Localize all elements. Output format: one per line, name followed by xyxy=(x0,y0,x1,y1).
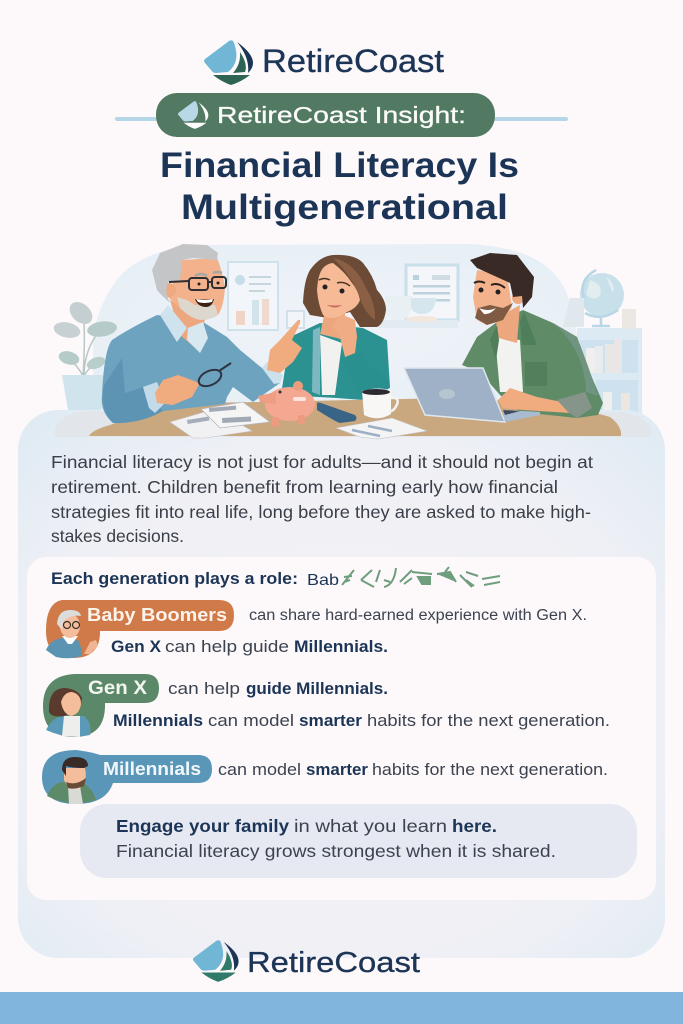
millennials role: smarter xyxy=(306,761,369,779)
hair xyxy=(303,255,386,327)
callout xyxy=(80,804,637,878)
neck xyxy=(320,310,345,340)
coffee mug xyxy=(362,388,398,418)
gen x role xyxy=(168,680,388,698)
millennials role xyxy=(218,761,608,779)
smartphone xyxy=(317,402,356,423)
illustration backdrop xyxy=(93,244,590,410)
gen x role: guide Millennials. xyxy=(246,680,388,698)
small frame xyxy=(287,311,304,328)
callout: in what you learn xyxy=(294,816,447,836)
shelf with cups xyxy=(378,296,458,328)
intro paragraph: Financial literacy is not just for adults—and it should not begin at xyxy=(51,452,593,472)
icon: banner logo xyxy=(178,101,208,129)
plant xyxy=(52,298,118,411)
young man xyxy=(462,253,603,418)
intro paragraph: stakes decisions. xyxy=(51,526,184,546)
avatar: older man xyxy=(46,610,98,658)
role line: millennials: Millennials xyxy=(113,712,203,730)
millennials role: can model xyxy=(218,761,301,779)
woman's hand xyxy=(333,315,357,357)
intro paragraph: strategies fit into real life, long before they are asked to make high- xyxy=(51,502,591,522)
held eyeglasses xyxy=(196,363,231,389)
millennials role: habits for the next generation. xyxy=(372,761,608,779)
head xyxy=(168,258,225,320)
role line: millennials: can model xyxy=(208,712,294,730)
baby boomers role: can share hard-earned experience with Gen X. xyxy=(249,607,587,624)
glasses xyxy=(169,277,226,290)
leaf flourish xyxy=(342,567,500,587)
plant pot xyxy=(62,375,103,411)
main content panel xyxy=(18,410,665,958)
callout: Financial literacy grows strongest when it is shared. xyxy=(116,841,556,861)
title xyxy=(160,146,519,227)
title: Financial Literacy Is xyxy=(160,146,519,185)
shirt cuff xyxy=(143,382,165,413)
neck xyxy=(170,300,205,352)
baby boomers label: Baby Boomers xyxy=(87,604,227,625)
intro paragraph: retirement. Children benefit from learning early how financial xyxy=(51,477,558,497)
woman xyxy=(281,255,390,400)
avatar: woman xyxy=(46,688,90,737)
role line: millennials: habits for the next generation. xyxy=(367,712,610,730)
row: baby boomers xyxy=(46,600,587,658)
holding hand xyxy=(155,375,200,405)
laptop xyxy=(404,368,540,422)
role line: millennials: smarter xyxy=(299,712,363,730)
table xyxy=(89,398,621,436)
millennials pill xyxy=(42,750,212,804)
role line: gen x xyxy=(111,638,388,656)
wordmark: RetireCoast xyxy=(262,43,444,79)
head xyxy=(473,270,512,325)
millennials label: Millennials xyxy=(103,759,201,779)
hair xyxy=(470,253,534,308)
older man xyxy=(102,244,302,423)
avatar: young man xyxy=(47,757,96,804)
neck xyxy=(495,305,520,343)
role line: gen x: Gen X xyxy=(111,638,161,656)
table shadow xyxy=(55,411,651,437)
woman's sleeve xyxy=(343,352,390,400)
hair xyxy=(152,244,218,303)
baby boomers pill xyxy=(46,600,234,658)
piggy bank xyxy=(258,381,315,427)
green shirt xyxy=(462,310,603,418)
insight banner xyxy=(115,93,568,137)
role line: gen x: Millennials. xyxy=(294,638,388,656)
generations card xyxy=(27,557,656,900)
title: Multigenerational xyxy=(181,188,508,227)
gen x label: Gen X xyxy=(88,678,147,699)
role line: gen x: can help guide xyxy=(165,638,289,656)
footer logo xyxy=(193,940,420,982)
cardigan xyxy=(281,323,390,400)
collar xyxy=(160,305,187,342)
card heading xyxy=(51,567,500,589)
globe and bookshelf xyxy=(563,270,642,415)
gen x pill xyxy=(43,674,159,737)
paper documents xyxy=(170,402,427,439)
icon: sailboat logo xyxy=(204,40,253,85)
top logo xyxy=(204,40,444,85)
pointing hand xyxy=(267,320,302,373)
poster: chart xyxy=(228,262,278,330)
row: gen x xyxy=(43,674,610,737)
card heading: Bab xyxy=(307,572,339,589)
footer bar xyxy=(0,992,683,1024)
t-shirt xyxy=(495,337,523,392)
globe xyxy=(580,273,624,317)
face xyxy=(317,263,360,318)
footer wordmark: RetireCoast xyxy=(247,947,420,979)
card heading: Each generation plays a role: xyxy=(51,570,298,588)
callout: here. xyxy=(452,816,497,836)
intro paragraph xyxy=(51,452,593,546)
sweater xyxy=(102,315,280,423)
callout: Engage your family xyxy=(116,816,289,836)
icon: footer sailboat xyxy=(193,940,239,982)
role line: millennials xyxy=(113,712,610,730)
poster: notes xyxy=(406,265,458,320)
row: millennials xyxy=(42,750,608,804)
gen x role: can help xyxy=(168,680,240,698)
forearm and hand xyxy=(498,388,570,413)
banner text: RetireCoast Insight: xyxy=(217,102,466,128)
